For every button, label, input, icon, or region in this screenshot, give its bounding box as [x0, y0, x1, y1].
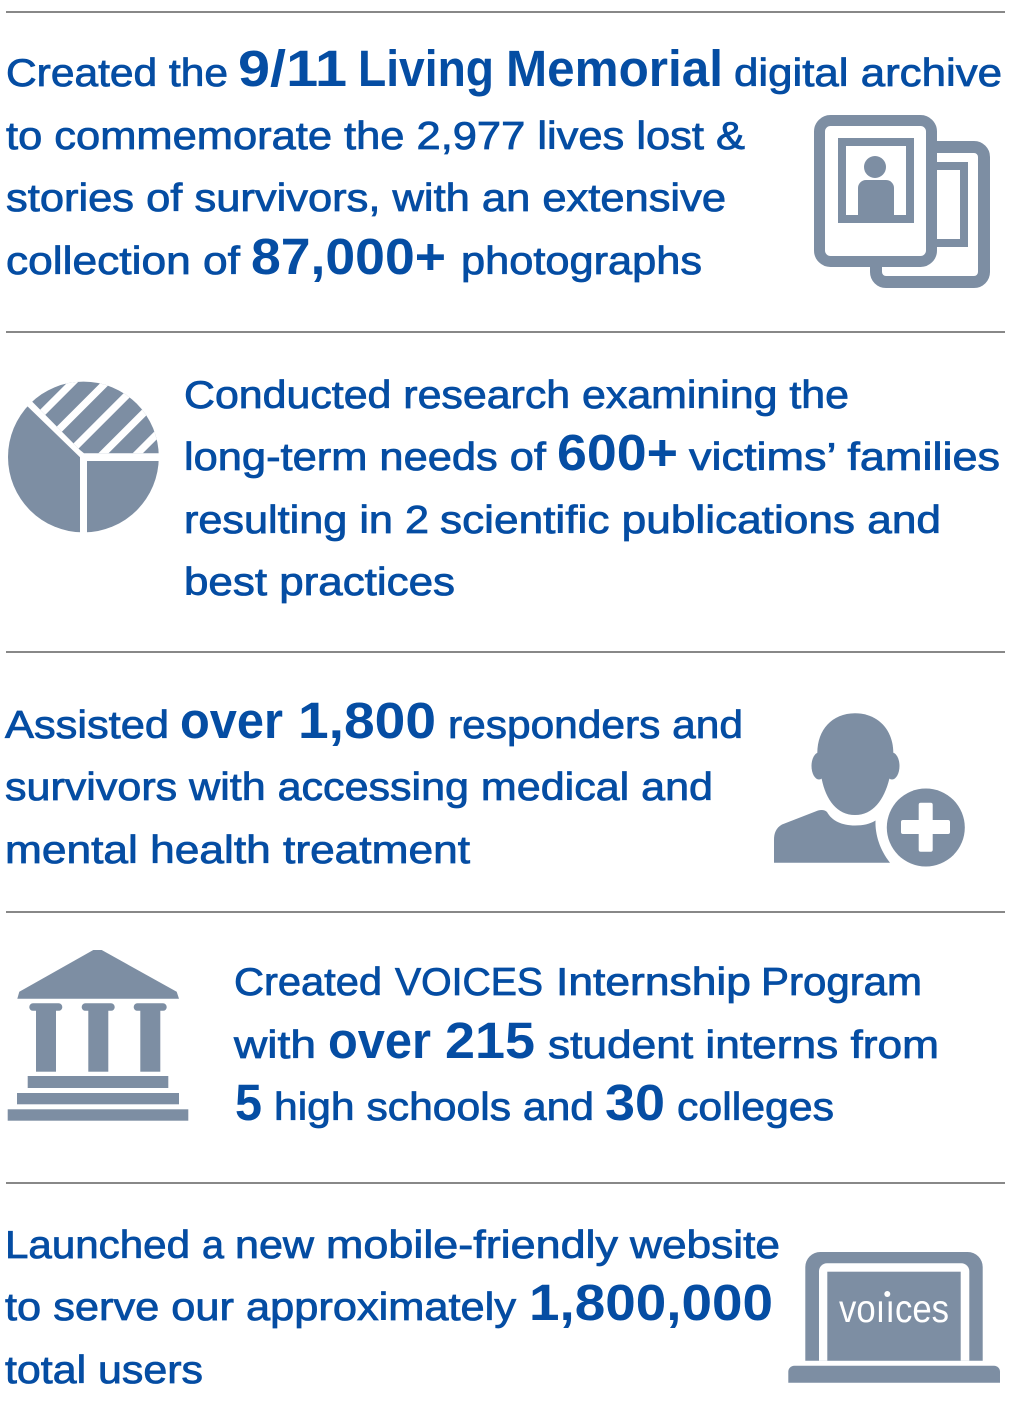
text block: Living Memorial description: digital archive: [734, 52, 1002, 95]
text block: website description: website: [629, 1224, 780, 1267]
text block: Living Memorial description: collection of: [6, 240, 240, 283]
text block: assistance description: 1,800: [298, 692, 436, 749]
text block: internship description: Internship: [556, 961, 751, 1004]
text block: website description: a: [202, 1224, 224, 1267]
text block: internship description: Program: [761, 961, 922, 1004]
text block: internship description: Created: [234, 961, 382, 1004]
icon: laptop showing voices logo: voııces: [839, 1288, 949, 1331]
icon: institution building: [8, 950, 188, 1121]
text block: assistance description: over: [180, 692, 283, 749]
panel: 9/11 Living Memorial archive: [6, 40, 1002, 285]
text block: research description: resulting in 2: [184, 499, 429, 542]
text block: internship description: student interns from: [548, 1024, 939, 1067]
icon: laptop showing voices logo: [788, 1252, 1000, 1383]
text block: assistance description: responders and: [448, 704, 743, 747]
text block: research description: best practices: [184, 561, 455, 604]
text block: research description: [184, 374, 1000, 604]
text block: Living Memorial description: [6, 40, 1002, 285]
text block: internship description: high schools and: [274, 1086, 594, 1129]
text block: assistance description: [5, 692, 743, 872]
icon: pie chart: [8, 382, 159, 532]
text block: internship description: with: [233, 1024, 316, 1067]
panel: VOICES Internship Program: [8, 950, 939, 1131]
text block: Living Memorial description: 9/11: [238, 40, 347, 97]
text block: research description: scientific publications and: [440, 499, 941, 542]
text block: research description: 600+: [557, 424, 678, 481]
icon: person with medical plus: [774, 713, 965, 866]
text block: internship description: 5: [235, 1074, 262, 1131]
text block: internship description: 30: [605, 1074, 665, 1131]
text block: internship description: over: [328, 1012, 431, 1069]
text block: Living Memorial description: Created the: [6, 52, 228, 95]
text block: Living Memorial description: Living: [358, 40, 494, 97]
text block: website description: 1,800,000: [529, 1274, 773, 1331]
text block: Living Memorial description: to commemorate the 2,977 lives lost &: [6, 115, 745, 158]
text block: Living Memorial description: stories of survivors, with an extensive: [6, 177, 726, 220]
text block: website description: mobile-friendly: [326, 1224, 619, 1267]
text block: website description: total users: [5, 1349, 203, 1392]
text block: internship description: [233, 961, 939, 1131]
text block: research description: victims’ families: [689, 436, 1000, 479]
panel: research on victims' families: [0, 370, 1000, 604]
text block: website description: [5, 1224, 780, 1392]
text block: internship description: colleges: [677, 1086, 834, 1129]
text block: website description: Launched: [5, 1224, 190, 1267]
text block: research description: Conducted research examining the: [184, 374, 849, 417]
panel: responders and survivors assistance: [5, 692, 965, 872]
text block: internship description: 215: [445, 1012, 535, 1069]
text block: website description: new: [235, 1224, 315, 1267]
text block: internship description: VOICES: [395, 961, 543, 1004]
text block: assistance description: mental health treatment: [5, 829, 470, 872]
text block: website description: to serve our approximately: [5, 1286, 517, 1329]
icon: photographs: [820, 120, 984, 282]
panel: mobile-friendly website: [5, 1224, 1000, 1392]
text block: research description: long-term needs of: [184, 436, 546, 479]
text block: assistance description: survivors with accessing medical and: [5, 766, 713, 809]
text block: Living Memorial description: Memorial: [506, 40, 723, 97]
text block: assistance description: Assisted: [5, 704, 169, 747]
text block: Living Memorial description: photographs: [461, 240, 702, 283]
text block: Living Memorial description: 87,000+: [251, 228, 446, 285]
